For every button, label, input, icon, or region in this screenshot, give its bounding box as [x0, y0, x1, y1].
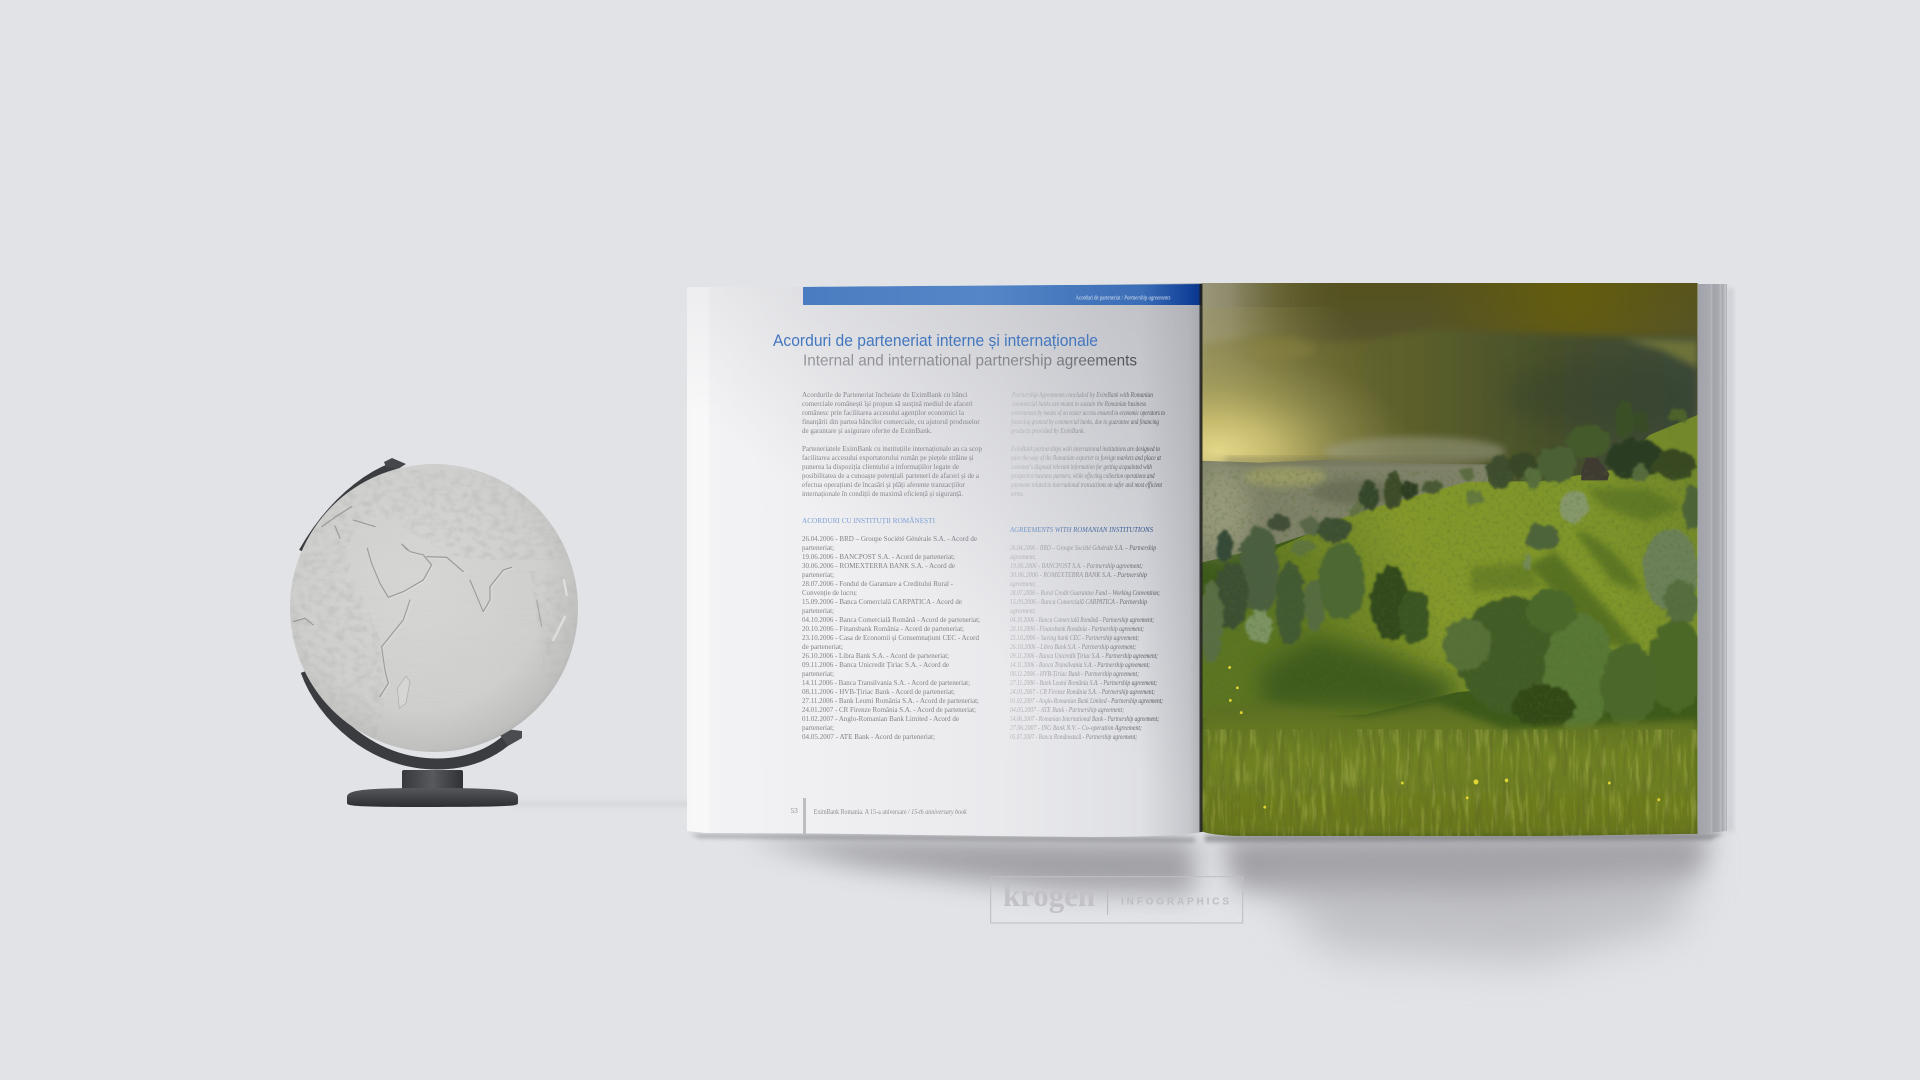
open book	[687, 283, 1734, 837]
intro text english: products provided by EximBank.	[1010, 426, 1085, 435]
page block edge	[1698, 284, 1734, 834]
agreement list romanian: 09.11.2006 - Banca Unicredit Țiriac S.A. - Acord de	[802, 660, 949, 670]
intro text english: prospective business partners, while effecting collection operations and	[1010, 471, 1155, 480]
header bar label: Acorduri de parteneriat / Partnership agreements	[1076, 294, 1171, 302]
agreement list english: agreement;	[1010, 579, 1036, 588]
subheading romanian: ACORDURI CU INSTITUȚII ROMÂNEȘTI	[802, 515, 936, 526]
footer text: EximBank Romania. A 15-a aniversare / 15-th anniversary book	[814, 807, 967, 816]
agreement list romanian: 26.10.2006 - Libra Bank S.A. - Acord de parteneriat;	[802, 651, 949, 660]
agreement list english: 14.11.2006 - Banca Transilvania S.A. - Partnership agreement;	[1010, 660, 1150, 669]
agreement list english: 04.10.2006 - Banca Comercială Română - Partnership agreement;	[1010, 615, 1154, 624]
agreement list english: 04.05.2007 - ATE Bank - Partnership agreement;	[1010, 705, 1124, 714]
photo hillside hut	[1581, 458, 1609, 480]
photo yellow flowers	[1228, 666, 1660, 809]
agreement list romanian: parteneriat;	[802, 669, 834, 678]
agreement list romanian: 23.10.2006 - Casa de Economii și Consemnațiuni CEC - Acord	[802, 633, 979, 642]
intro text romanian: de garantare și asigurare oferite de EximBank.	[802, 426, 932, 435]
agreement list english: 19.06.2006 - BANCPOST S.A. - Partnership agreement;	[1010, 561, 1143, 570]
globe arm end cap	[500, 729, 522, 746]
intro text english: commercial banks are meant to sustain the Romanian business	[1012, 399, 1146, 408]
intro text romanian: internaționale în condiții de maximă eficiență și siguranță.	[802, 489, 963, 498]
photo left forest	[1199, 466, 1474, 663]
intro text english: Partnership Agreements concluded by EximBank with Romanian	[1011, 390, 1153, 399]
agreement list romanian: 28.07.2006 - Fondul de Garantare a Creditului Rural -	[802, 579, 954, 588]
agreement list romanian: 30.06.2006 - ROMEXTERRA BANK S.A. - Acord de	[802, 561, 955, 570]
intro text romanian: Parteneriatele EximBank cu instituțiile internaționale au ca scop	[802, 444, 982, 453]
agreement list english: 01.02.2007 - Anglo-Romanian Bank Limited - Partnership agreement;	[1010, 696, 1163, 705]
globe base plate	[347, 788, 518, 807]
agreement list romanian: 01.02.2007 - Anglo-Romanian Bank Limited - Acord de	[802, 714, 959, 723]
agreement list english: 27.11.2006 - Bank Leumi România S.A. - Partnership agreement;	[1010, 678, 1157, 687]
agreement list romanian	[802, 534, 980, 741]
photo ridge trees	[1466, 401, 1696, 570]
heading english: Internal and international partnership agreements	[803, 352, 1137, 370]
agreement list english: 23.10.2006 – Saving bank CEC - Partnership agreement;	[1010, 633, 1139, 642]
agreement list english: 26.10.2006 - Libra Bank S.A. - Partnership agreement;	[1010, 642, 1136, 651]
intro text romanian: românesc prin facilitarea accesului agenților economici la	[802, 408, 965, 417]
agreement list romanian: de parteneriat;	[802, 642, 843, 651]
agreement list english: 08.11.2006 - HVB-Țiriac Bank - Partnership agreement;	[1010, 669, 1139, 679]
watermark tagline: INFOGRAPHICS	[1121, 896, 1229, 908]
globe coastlines	[293, 507, 567, 708]
subheading english: AGREEMENTS WITH ROMANIAN INSTITUTIONS	[1009, 525, 1153, 534]
intro text english: environment by means of an easier access ensured to economic operators to	[1011, 408, 1165, 417]
globe stem	[402, 770, 463, 790]
intro text english: customer's disposal relevant information for getting acquainted with	[1011, 462, 1152, 471]
agreement list romanian: 14.11.2006 - Banca Transilvania S.A. - Acord de parteneriat;	[802, 678, 970, 687]
agreement list romanian: 26.04.2006 - BRD – Groupe Société Générale S.A. - Acord de	[802, 534, 977, 543]
intro text english: terms.	[1011, 489, 1024, 498]
page number: 53	[790, 806, 798, 815]
agreement list english: agreement;	[1010, 606, 1036, 615]
photo sun glow	[1202, 308, 1507, 464]
photo sky	[1202, 283, 1698, 836]
spine shadow	[1200, 284, 1202, 832]
intro text romanian: Acordurile de Parteneriat încheiate de EximBank cu bănci	[802, 390, 968, 399]
intro text romanian	[802, 390, 982, 498]
photo foliage texture	[1202, 470, 1698, 729]
agreement list romanian: 04.05.2007 - ATE Bank - Acord de parteneriat;	[802, 732, 935, 741]
scene: globe and open book mockup	[290, 283, 1734, 976]
agreement list english: 14.06.2007 - Romanian International Bank - Partnership agreement;	[1010, 714, 1159, 723]
intro text english: EximBank partnerships with international institutions are designed to	[1010, 444, 1160, 453]
globe sphere	[290, 464, 578, 752]
krogen infographics watermark	[991, 877, 1243, 923]
agreement list english: 09.11.2006 - Banca Unicredit Țiriac S.A. - Partnership agreement;	[1010, 651, 1158, 661]
intro text romanian: facilitarea accesului exportatorului român pe piețele străine și	[802, 453, 974, 462]
agreement list romanian: 15.09.2006 - Banca Comercială CARPATICA - Acord de	[802, 597, 962, 606]
agreement list english	[1009, 543, 1163, 741]
photo mid valley	[1194, 458, 1488, 563]
intro text english	[1010, 390, 1165, 498]
agreement list english: 15.09.2006 - Banca Comercială CARPATICA - Partnership	[1010, 597, 1147, 606]
intro text english: financing granted by commercial banks, due to guarantee and financing	[1011, 417, 1159, 426]
agreement list romanian: 20.10.2006 - Finansbank România - Acord de parteneriat;	[802, 624, 964, 633]
intro text english: payments related to international transactions on safer and most efficient	[1010, 480, 1163, 489]
agreement list english: 26.04.2006 - BRD – Groupe Société Générale S.A. – Partnership	[1010, 543, 1156, 552]
globe on stand	[290, 458, 578, 807]
agreement list english: 27.06.2007 - ING Bank N.V. – Co-operation Agreement;	[1010, 723, 1142, 732]
agreement list romanian: parteneriat;	[802, 723, 834, 732]
photo right bushes	[1443, 485, 1704, 731]
agreement list english: 28.07.2006 – Rural Credit Guarantee Fund – Working Convention;	[1010, 588, 1160, 597]
intro text romanian: posibilitatea de a cunoaște potențiali parteneri de afaceri și de a	[802, 471, 980, 480]
agreement list romanian: parteneriat;	[802, 606, 834, 615]
agreement list romanian: 19.06.2006 - BANCPOST S.A. - Acord de parteneriat;	[802, 552, 955, 561]
intro text romanian: comerciale românești își propun să susțină mediul de afaceri	[802, 399, 973, 408]
globe lower arm	[306, 671, 512, 764]
agreement list romanian: 24.01.2007 - CR Firenze România S.A. - Acord de parteneriat;	[802, 705, 976, 714]
right page landscape photo	[1194, 283, 1704, 836]
agreement list romanian: parteneriat;	[802, 570, 834, 579]
globe base shadow	[510, 801, 695, 807]
globe upper arm	[303, 465, 398, 552]
agreement list romanian: parteneriat;	[802, 543, 834, 552]
agreement list romanian: 04.10.2006 - Banca Comercială Română - Acord de parteneriat;	[802, 615, 980, 624]
photo distant hills	[1202, 329, 1699, 500]
agreement list english: 05.07.2007 - Banca Românească - Partnership agreement;	[1010, 732, 1137, 741]
agreement list romanian: 08.11.2006 - HVB-Țiriac Bank - Acord de parteneriat;	[802, 687, 955, 697]
header bar	[803, 284, 1202, 305]
agreement list romanian: 27.11.2006 - Bank Leumi România S.A. - Acord de parteneriat;	[802, 696, 979, 705]
globe upper arm cap	[384, 458, 406, 469]
book drop shadow	[690, 833, 1725, 962]
intro text romanian: finanțării din partea băncilor comerciale, cu ajutorul produselor	[802, 417, 980, 426]
agreement list english: 24.01.2007 - CR Firenze România S.A. - Partnership agreement;	[1010, 687, 1155, 696]
intro text english: pave the way of the Romanian exporter to foreign markets and place at	[1010, 453, 1162, 462]
watermark divider	[1107, 885, 1108, 915]
agreement list english: agreement;	[1010, 552, 1036, 561]
photo slope shadows	[1260, 489, 1681, 718]
left page	[687, 283, 1202, 837]
photo main green slope	[1202, 415, 1698, 718]
intro text romanian: punerea la dispoziția clientului a informațiilor legate de	[802, 462, 959, 471]
watermark logo: krogen	[1003, 877, 1095, 913]
agreement list english: 30.06.2006 - ROMEXTERRA BANK S.A. - Partnership	[1009, 570, 1147, 579]
agreement list romanian: Convenție de lucru;	[802, 588, 857, 597]
agreement list english: 20.10.2006 - Finansbank România - Partnership agreement;	[1010, 624, 1144, 633]
intro text romanian: efectua operațiuni de încasări și plăți aferente tranzacțiilor	[802, 480, 966, 489]
watermark frame	[991, 877, 1243, 923]
heading romanian: Acorduri de parteneriat interne și internaționale	[773, 332, 1098, 350]
footer rule	[803, 798, 806, 834]
globe land relief	[292, 470, 560, 718]
photo foreground grass	[1202, 703, 1698, 836]
